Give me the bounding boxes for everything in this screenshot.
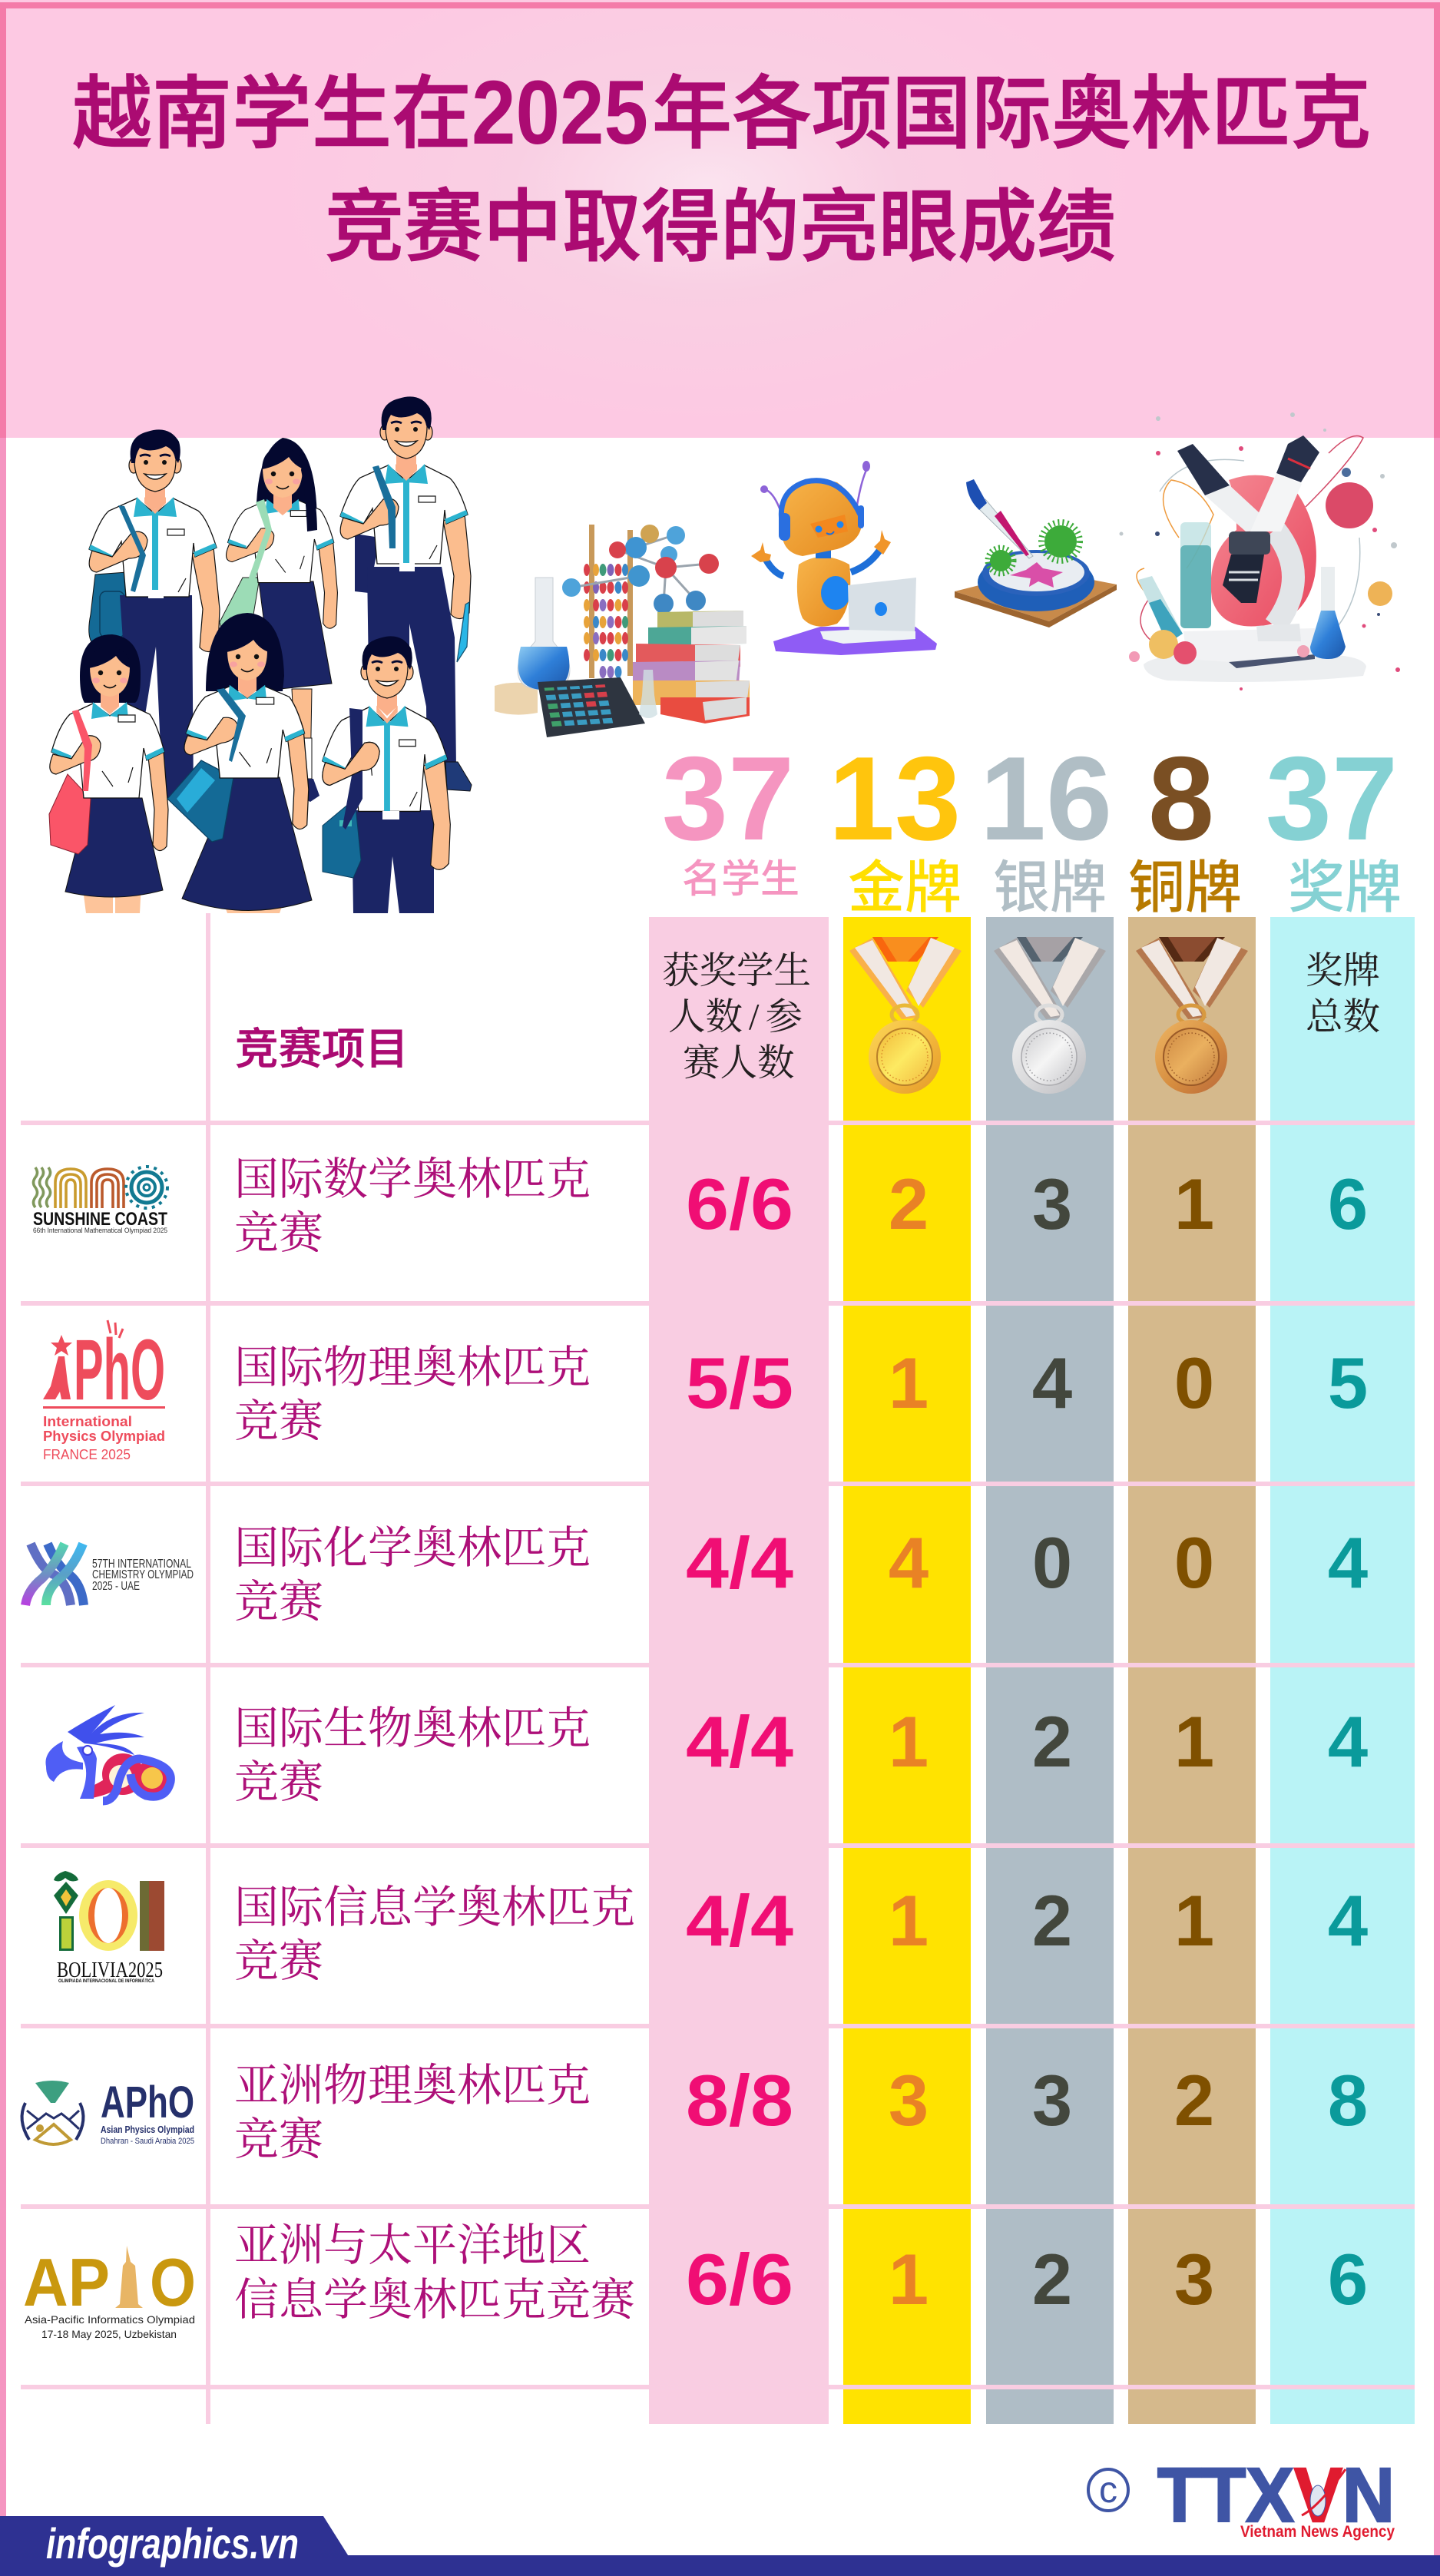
logo: IPhO France: Physics Olympiad (43, 1428, 165, 1444)
row 2: International Physics Olympiad (43, 1320, 1368, 1462)
results: 2 (1032, 1880, 1072, 1961)
row 5: International Olympiad in Informatics (54, 1871, 1368, 1986)
results: 4 (1328, 1522, 1368, 1603)
eyepieces (1177, 444, 1230, 495)
title: 竞赛中取得的亮眼成绩 (325, 183, 1116, 271)
results: 4/4 (686, 1701, 793, 1782)
competition name (234, 1882, 635, 1986)
results: 2 (889, 1164, 929, 1244)
competition name: 国际物理奥林匹克 (234, 1343, 591, 1392)
table: coloured medal columns (649, 917, 1415, 2424)
icon: robot with laptop (751, 461, 937, 655)
logo: APhO Saudi Arabia: Asian Physics Olympiad (101, 2124, 194, 2135)
stat: 37 total medals: 奖牌 (1288, 856, 1402, 919)
microscope arm (1275, 530, 1293, 626)
stat: 37 total medals (1266, 732, 1402, 919)
results: 1 (889, 1343, 929, 1423)
logo: APhO Saudi Arabia (22, 2078, 194, 2146)
competition name: 国际数学奥林匹克 (234, 1154, 591, 1204)
logo: IOI Bolivia: OLIMPIADA INTERNACIONAL DE INFORMÁTICA (58, 1977, 154, 1984)
title: 2025 (472, 62, 648, 164)
competition name: 竞赛 (234, 1208, 323, 1258)
row 1: International Mathematical Olympiad (33, 1154, 1368, 1258)
competition name (234, 2220, 635, 2325)
icon: book stack (633, 611, 750, 723)
icon: small glass beaker (639, 670, 657, 718)
microscope base (1144, 654, 1366, 682)
logo: APIO Uzbekistan: 17-18 May 2025, Uzbekistan (41, 2328, 177, 2340)
stat: 16 silver medals: 16 (980, 732, 1112, 865)
results: 2 (1174, 2060, 1214, 2141)
icon: bronze medal (1136, 937, 1248, 1094)
row 6: Asian Physics Olympiad (22, 2060, 1368, 2164)
objective lens (1229, 531, 1270, 555)
competition name: 竞赛 (234, 1757, 323, 1807)
results: 6 (1328, 2239, 1368, 2319)
results: 1 (1174, 1164, 1214, 1244)
logo: APIO Uzbekistan (23, 2244, 196, 2340)
title: 越南学生在 (72, 70, 472, 159)
column heading: competition: 竞赛项目 (235, 1025, 409, 1073)
results (686, 2239, 1368, 2319)
panel: pink title header (0, 0, 1440, 438)
competition name: 国际化学奥林匹克 (234, 1523, 591, 1573)
column heading: total medals: 奖牌 (1306, 951, 1380, 992)
icon: molecule (562, 525, 719, 621)
stat: 8 bronze medals: 铜牌 (1128, 856, 1242, 919)
logo: copyright and TTXVN Vietnam News Agency: c (1099, 2470, 1117, 2511)
competition name: 竞赛 (234, 1396, 323, 1446)
competition name (234, 1343, 591, 1446)
competition name (234, 1523, 591, 1627)
competition name: 国际信息学奥林匹克 (234, 1882, 635, 1932)
results: 1 (889, 2239, 929, 2319)
results (686, 1880, 1368, 1961)
results: 3 (1032, 2060, 1072, 2141)
row 3: International Chemistry Olympiad (25, 1522, 1368, 1627)
results: 4/4 (686, 1522, 793, 1603)
stat: 8 bronze medals: 8 (1148, 732, 1214, 865)
results: 5/5 (686, 1343, 793, 1423)
competition name (234, 1704, 591, 1807)
footer: navy band with infographics.vn tab: infographics.vn (46, 2519, 299, 2568)
column heading: winners over participants (662, 951, 811, 1084)
icon: flask (495, 578, 570, 715)
results: 5 (1328, 1343, 1368, 1423)
logo: APIO Uzbekistan: O (150, 2244, 196, 2320)
logo: APhO Saudi Arabia: Dhahran - Saudi Arabia 2025 (101, 2137, 194, 2146)
results: 3 (889, 2060, 929, 2141)
column heading: winners over participants: 赛人数 (683, 1043, 795, 1084)
column heading: winners over participants: 获奖学生 (662, 951, 811, 992)
results: 1 (889, 1880, 929, 1961)
footer: navy band with infographics.vn tab (0, 2516, 1440, 2576)
student: back left boy (89, 429, 220, 799)
row 4: International Biology Olympiad (45, 1701, 1368, 1807)
stat: 37 total medals: 37 (1266, 732, 1398, 865)
results: 0 (1032, 1522, 1072, 1603)
red swirl (1211, 475, 1316, 627)
results: 1 (1174, 1701, 1214, 1782)
results: 2 (1032, 1701, 1072, 1782)
logo: IChO UAE: CHEMISTRY OLYMPIAD (92, 1568, 194, 1581)
logo: APhO Saudi Arabia: APhO (101, 2078, 194, 2127)
results: 0 (1174, 1522, 1214, 1603)
title (72, 62, 1371, 271)
icon: silver medal (994, 937, 1106, 1094)
results: 4/4 (686, 1880, 793, 1961)
logo: copyright and TTXVN Vietnam News Agency: Vietnam News Agency (1240, 2523, 1395, 2541)
logo: IPhO France: FRANCE 2025 (43, 1447, 131, 1462)
results: 1 (1174, 1880, 1214, 1961)
results (686, 1164, 1368, 1244)
stat: 13 gold medals: 13 (829, 732, 961, 865)
logo: IChO UAE: 2025 - UAE (92, 1580, 140, 1593)
results: 4 (889, 1522, 929, 1603)
results: 8/8 (686, 2060, 793, 2141)
logo: IOI Bolivia (54, 1871, 164, 1984)
competition name: 信息学奥林匹克竞赛 (234, 2275, 635, 2325)
stat: 37 students: 37 (662, 732, 794, 865)
logo: IPhO France: PhO (74, 1322, 165, 1418)
competition name: 竞赛 (234, 1577, 323, 1627)
results (686, 2060, 1368, 2141)
logo: IMO Sunshine Coast: SUNSHINE COAST (33, 1209, 167, 1230)
results: 6/6 (686, 1164, 793, 1244)
logo: IPhO France (43, 1320, 165, 1462)
column heading: total medals (1306, 951, 1380, 1038)
stat: 16 silver medals: 银牌 (993, 856, 1107, 919)
logo: IOI Bolivia: BOLIVIA2025 (57, 1958, 163, 1982)
logo: APIO Uzbekistan: AP (23, 2244, 110, 2320)
competition name (234, 1154, 591, 1258)
illustration: group of six students (49, 396, 472, 913)
student: back centre girl (220, 438, 337, 802)
title: 年各项国际奥林匹克 (652, 70, 1371, 159)
stat: 37 students: 名学生 (682, 857, 799, 901)
test tubes (1180, 522, 1211, 628)
results (686, 1522, 1368, 1603)
results: 4 (1328, 1701, 1368, 1782)
icon: petri dish with bacteria and dropper (955, 479, 1117, 627)
icon: calculator (538, 677, 645, 737)
column heading: total medals: 总数 (1306, 997, 1380, 1038)
competition name: 国际生物奥林匹克 (234, 1704, 591, 1753)
results: 4 (1328, 1880, 1368, 1961)
results: 1 (889, 1701, 929, 1782)
stat: 8 bronze medals (1128, 732, 1242, 919)
student: back right boy (340, 396, 472, 791)
column heading: winners over participants: 人数/参 (668, 997, 803, 1038)
icon: abacus (584, 525, 633, 678)
row 7: Asia-Pacific Informatics Olympiad (23, 2220, 1368, 2340)
results: 3 (1174, 2239, 1214, 2319)
results (686, 1343, 1368, 1423)
logo: IChO UAE (25, 1544, 194, 1605)
logo: IMO Sunshine Coast: 66th International Mathematical Olympiad 2025 (33, 1227, 167, 1234)
logo: copyright and TTXVN Vietnam News Agency: TTXVN (1157, 2452, 1395, 2538)
results: 4 (1032, 1343, 1072, 1423)
logo: IChO UAE: 57TH INTERNATIONAL (92, 1558, 191, 1571)
orbit lines and dots (1137, 436, 1363, 668)
competition name: 竞赛 (234, 1936, 323, 1986)
student: front left girl (49, 634, 168, 913)
results: 2 (1032, 2239, 1072, 2319)
student: front centre girl (167, 613, 312, 913)
logo: IBO bird (45, 1705, 172, 1801)
competition name: 竞赛 (234, 2114, 323, 2164)
stat: 13 gold medals: 金牌 (848, 856, 962, 919)
logo: IPhO France: International (43, 1413, 132, 1429)
student: front right boy (323, 636, 450, 913)
colored spheres (1326, 482, 1373, 528)
illustration: flask, abacus, molecule, books and calculator (495, 525, 750, 737)
icon: gold medal (849, 937, 962, 1094)
results: 6/6 (686, 2239, 793, 2319)
logo: APIO Uzbekistan: Asia-Pacific Informatics Olympiad (25, 2313, 195, 2326)
results: 6 (1328, 1164, 1368, 1244)
competition name: 亚洲与太平洋地区 (234, 2220, 591, 2270)
icon: microscope with test tubes and orbits (1120, 412, 1400, 690)
results: 3 (1032, 1164, 1072, 1244)
competition name: 亚洲物理奥林匹克 (234, 2061, 591, 2111)
logo: IMO Sunshine Coast (33, 1167, 167, 1234)
results: 8 (1328, 2060, 1368, 2141)
competition name (234, 2061, 591, 2164)
results (686, 1701, 1368, 1782)
results: 0 (1174, 1343, 1214, 1423)
